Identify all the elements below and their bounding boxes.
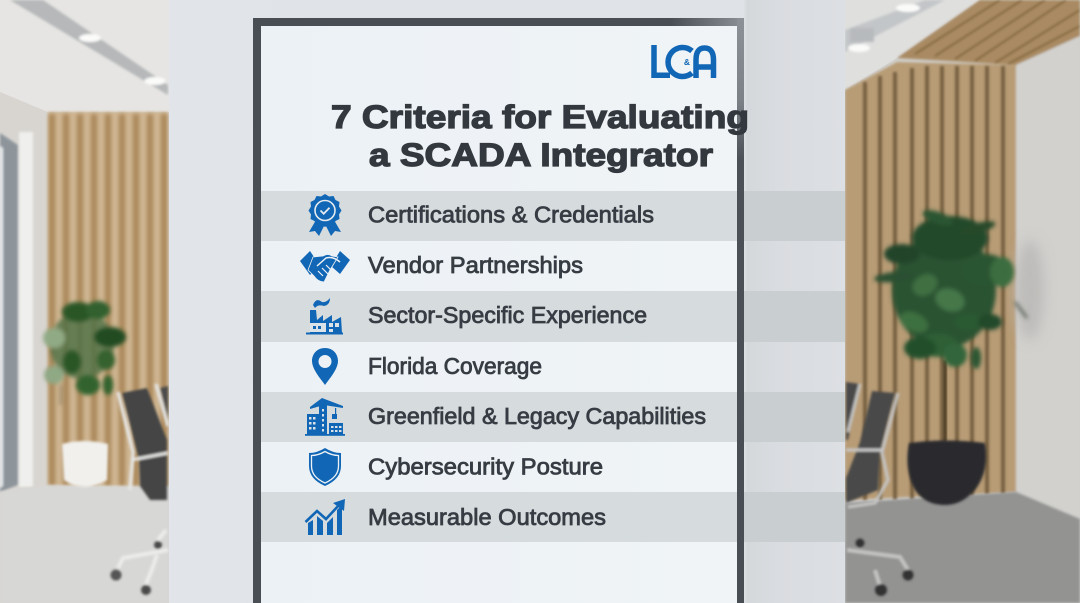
logo: LC&A bbox=[654, 45, 714, 78]
criterion 7: measurable outcomes bbox=[306, 499, 606, 535]
label: Florida Coverage bbox=[368, 353, 542, 379]
icon: handshake bbox=[300, 251, 350, 282]
plant: right tree in black pot bbox=[874, 207, 1027, 505]
criterion 6: cybersecurity bbox=[309, 448, 603, 486]
criterion 3: sector experience bbox=[306, 298, 647, 334]
title bbox=[331, 99, 749, 173]
display frame edges bbox=[253, 18, 744, 603]
label: Greenfield & Legacy Capabilities bbox=[368, 403, 706, 429]
label: Certifications & Credentials bbox=[368, 202, 654, 228]
title: a SCADA Integrator bbox=[369, 137, 713, 173]
criterion 5: greenfield and legacy bbox=[305, 398, 706, 436]
criterion 1: certifications bbox=[308, 194, 654, 236]
label: Sector-Specific Experience bbox=[368, 302, 647, 328]
label: Cybersecurity Posture bbox=[368, 454, 603, 480]
icon: map pin bbox=[312, 348, 338, 385]
chairs: right office chairs bbox=[846, 382, 914, 596]
scene: left office background bbox=[0, 0, 170, 603]
wall: foreground partition bbox=[169, 0, 845, 603]
title: 7 Criteria for Evaluating bbox=[331, 99, 749, 135]
logo: LC&A: & bbox=[684, 57, 690, 67]
icon: rising chart bbox=[306, 499, 345, 535]
icon: award ribbon badge bbox=[308, 194, 342, 236]
pot: left white planter bbox=[62, 441, 108, 487]
plant: left potted plant bbox=[43, 301, 126, 405]
criteria bands bbox=[261, 191, 845, 542]
criterion 2: vendor partnerships bbox=[300, 251, 583, 282]
icon: crane and buildings bbox=[305, 398, 345, 436]
chairs: left office chairs bbox=[110, 384, 168, 595]
display screen bbox=[253, 18, 737, 603]
label: Vendor Partnerships bbox=[368, 252, 583, 278]
icon: factory bbox=[306, 298, 343, 334]
icon: shield bbox=[309, 448, 341, 486]
criterion 4: Florida coverage bbox=[312, 348, 542, 385]
scene: right office background bbox=[845, 0, 1080, 603]
label: Measurable Outcomes bbox=[368, 504, 606, 530]
